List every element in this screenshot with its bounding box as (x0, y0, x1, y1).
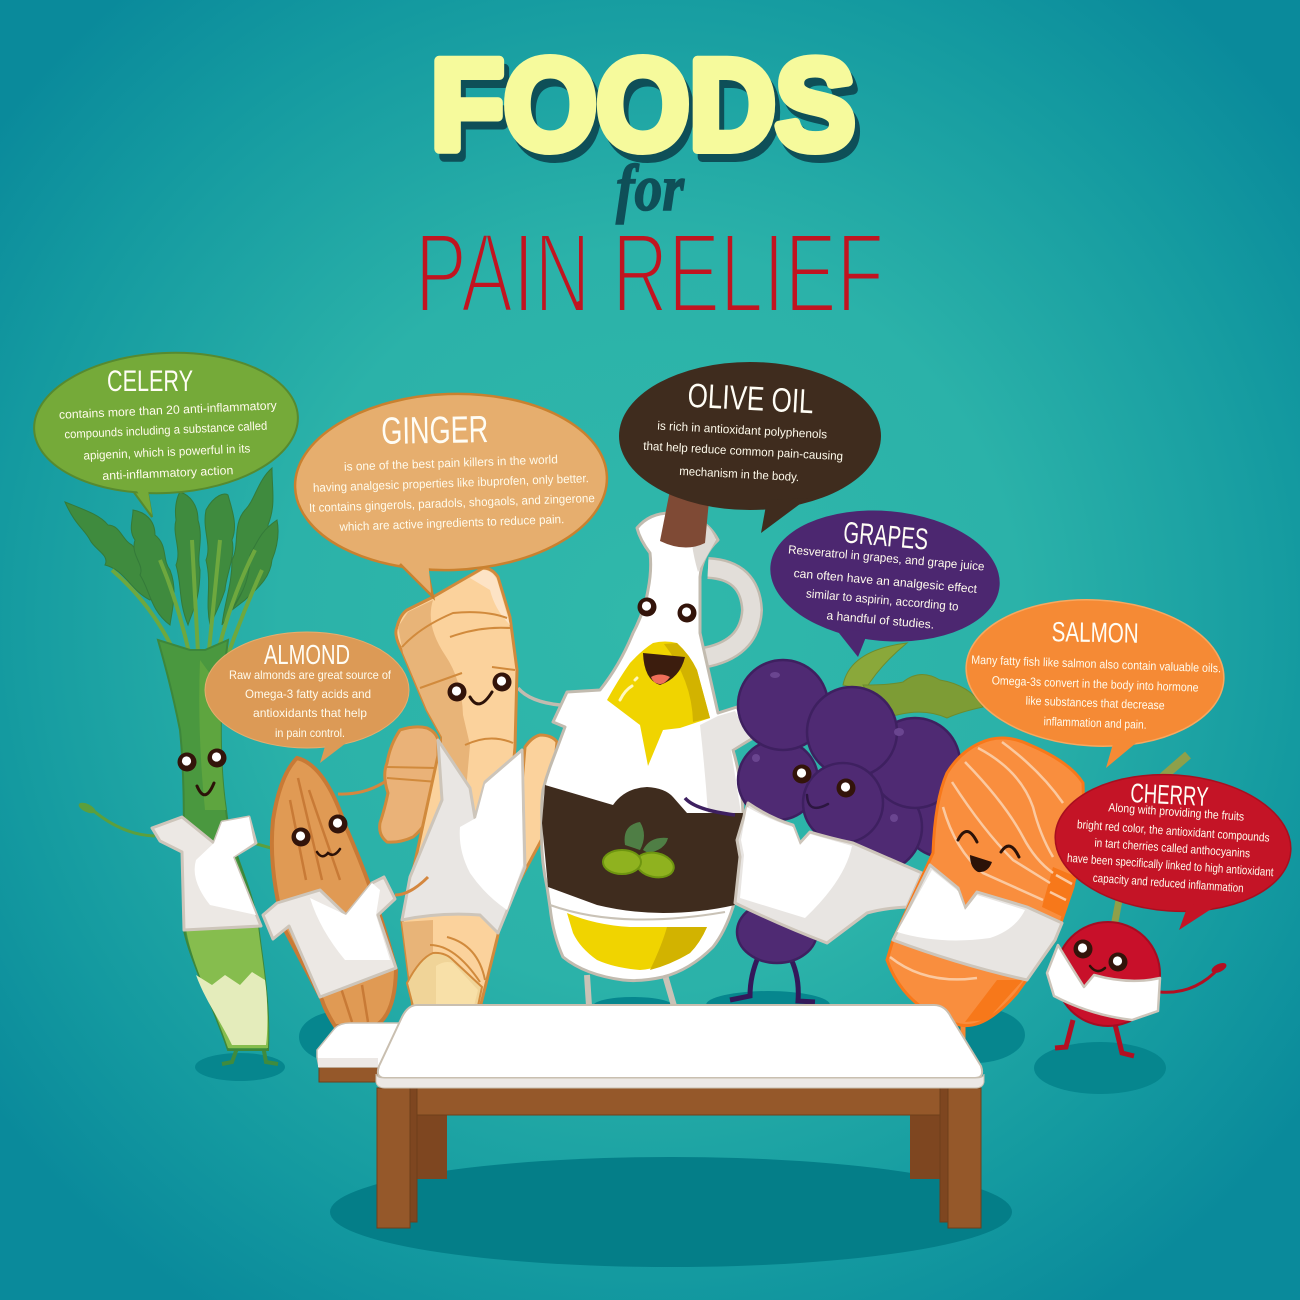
title (415, 34, 884, 336)
grapes description: similar to aspirin, according to (806, 586, 959, 614)
ginger description: is one of the best pain killers in the world (344, 452, 558, 474)
table rail (417, 1088, 940, 1115)
ginger root body (396, 568, 517, 1008)
character: cherry (1047, 755, 1228, 1056)
cherry face (1074, 940, 1092, 958)
ginger arm (518, 688, 560, 705)
floor shadows (195, 991, 1166, 1267)
grape shirt (735, 803, 922, 943)
celery description: compounds including a substance called (64, 419, 268, 441)
celery face (178, 752, 196, 772)
character: celery (65, 468, 278, 1064)
cherry stems (1155, 755, 1188, 785)
salmon description: Omega-3s convert in the body into hormone (991, 673, 1199, 695)
grapes description (788, 542, 985, 632)
celery description: contains more than 20 anti-inflammatory (59, 398, 277, 422)
table top (378, 1005, 982, 1078)
grape berries (737, 660, 983, 963)
celery heading: CELERY (107, 365, 193, 398)
grape leaves (843, 643, 907, 690)
ginger description: which are active ingredients to reduce pain. (338, 512, 565, 534)
character: salmon (887, 738, 1083, 1052)
salmon description: inflammation and pain. (1043, 714, 1147, 732)
salmon face (958, 831, 1019, 857)
salmon shirt (893, 865, 1062, 980)
title word: for: for (616, 152, 685, 225)
title words: PAIN RELIEF: PAIN RELIEF (415, 210, 884, 336)
almond description: antioxidants that help (253, 706, 367, 720)
celery description (59, 398, 277, 483)
celery shirt (152, 817, 261, 930)
ginger shirt (402, 740, 525, 933)
almond description: Raw almonds are great source of (229, 668, 392, 682)
bottle body (542, 513, 753, 981)
celery description: apigenin, which is powerful in its (83, 441, 251, 463)
almond face (292, 828, 310, 846)
grapes description: a handful of studies. (826, 608, 935, 632)
almond description: in pain control. (275, 726, 345, 740)
speech bubble: cherry (1051, 767, 1295, 930)
cherry arms and legs (1160, 967, 1220, 992)
ginger description: It contains gingerols, paradols, shogaols, and zingerone (309, 491, 595, 515)
olive oil description: mechanism in the body. (679, 464, 799, 484)
speech bubble: grapes (765, 501, 1005, 657)
speech bubble: olive oil (619, 362, 881, 533)
cherry description: in tart cherries called anthocyanins (1094, 836, 1251, 860)
salmon body (887, 738, 1083, 1026)
grape legs (730, 955, 815, 1002)
almond shirt (263, 877, 396, 997)
olive oil description: that help reduce common pain-causing (643, 439, 843, 463)
lower oil (567, 913, 707, 970)
celery stems (112, 540, 262, 700)
cherry description: capacity and reduced inflammation (1092, 871, 1244, 895)
grapes description: can often have an analgesic effect (793, 566, 978, 596)
character: almond (263, 758, 428, 1026)
cherry shirt (1047, 945, 1160, 1020)
cork (660, 490, 710, 548)
ginger description: having analgesic properties like ibuprofen, only better. (313, 471, 589, 495)
cherry description: bright red color, the antioxidant compounds (1077, 817, 1270, 845)
speech bubble: salmon (962, 593, 1228, 768)
almond arms (338, 781, 428, 895)
salmon description: Many fatty fish like salmon also contain valuable oils. (971, 653, 1221, 675)
grape face (792, 764, 812, 784)
table headrest (317, 1023, 403, 1082)
almond description (229, 668, 392, 740)
celery stalk (158, 640, 268, 1050)
cherry description: Along with providing the fruits (1108, 800, 1245, 824)
salmon leg (960, 1020, 966, 1052)
celery leaves (65, 468, 278, 625)
grapes description: Resveratrol in grapes, and grape juice (788, 542, 985, 574)
almond body (272, 758, 396, 1026)
celery description: anti-inflammatory action (102, 463, 234, 483)
bottle legs (587, 975, 674, 1006)
speech bubble: ginger (292, 389, 610, 597)
celery legs (222, 1040, 278, 1064)
grapes heading: GRAPES (842, 516, 930, 557)
olive oil description (643, 419, 843, 484)
title word: FOODS: FOODS (436, 42, 860, 185)
bottle label (542, 785, 743, 913)
massage table (317, 1005, 984, 1228)
character: grapes (685, 643, 983, 1002)
table back legs (417, 1115, 447, 1179)
oil and mouth (607, 642, 710, 766)
character: ginger (380, 568, 560, 1008)
cherry heading: CHERRY (1130, 778, 1209, 812)
table front legs (377, 1088, 981, 1228)
cherry description (1067, 800, 1275, 895)
speech bubble: almond (205, 632, 409, 763)
grape highlights (752, 672, 904, 822)
salmon heading: SALMON (1051, 616, 1139, 649)
salmon description (971, 653, 1221, 732)
ginger face (448, 682, 466, 702)
almond description: Omega-3 fatty acids and (245, 687, 371, 701)
title word: FOODS: FOODS (431, 34, 855, 177)
bottle handle (702, 568, 752, 658)
ginger heading: GINGER (381, 409, 489, 453)
speech bubble: celery (31, 346, 301, 517)
bottle eyes (638, 598, 656, 616)
celery arms (88, 806, 278, 850)
cherry body (1056, 922, 1160, 1026)
olive oil heading: OLIVE OIL (687, 377, 814, 421)
salmon description: like substances that decrease (1025, 694, 1165, 712)
grape arm (685, 798, 735, 815)
olive oil description: is rich in antioxidant polyphenols (657, 419, 827, 441)
ginger knobs (380, 727, 557, 893)
olive icon (603, 822, 676, 881)
almond heading: ALMOND (264, 639, 350, 670)
ginger description (309, 452, 595, 534)
character: olive oil bottle (542, 490, 753, 1006)
